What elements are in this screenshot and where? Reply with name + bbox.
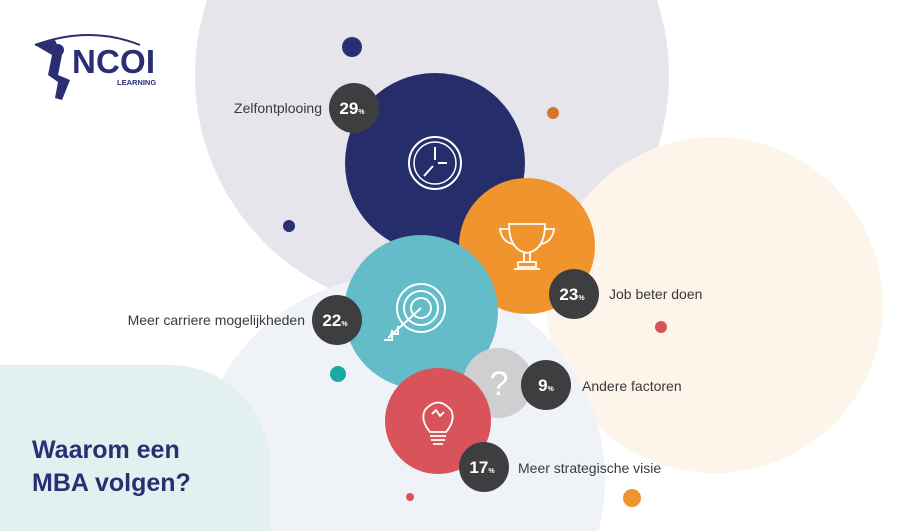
background circle: beige xyxy=(547,137,883,473)
logo: NCOI xyxy=(72,43,155,80)
background shape: mint xyxy=(0,365,270,531)
labels: Meer strategische visie xyxy=(518,460,661,476)
circle: teal target xyxy=(344,235,498,389)
title xyxy=(32,436,191,497)
decorative dots xyxy=(283,37,667,507)
background circle: grey xyxy=(195,0,669,312)
logo xyxy=(35,35,156,100)
labels: Job beter doen xyxy=(609,286,702,302)
labels xyxy=(128,100,702,476)
badges: 17% xyxy=(469,458,495,477)
circle: orange trophy xyxy=(459,178,595,314)
badges: 22% xyxy=(322,311,348,330)
circle: grey question: ? xyxy=(490,365,508,403)
title: MBA volgen? xyxy=(32,469,191,497)
labels: Meer carriere mogelijkheden xyxy=(128,312,305,328)
circle: red bulb xyxy=(385,368,491,474)
badges: 23% xyxy=(559,285,585,304)
labels: Andere factoren xyxy=(582,378,682,394)
badges xyxy=(312,83,599,492)
badges: 29% xyxy=(339,99,365,118)
title: Waarom een xyxy=(32,436,180,464)
circle: navy clock xyxy=(345,73,525,253)
logo: LEARNING xyxy=(117,78,156,87)
circle: grey question xyxy=(463,348,533,418)
badges: 9% xyxy=(538,376,555,395)
background circle: pale blue xyxy=(195,275,605,531)
labels: Zelfontplooing xyxy=(234,100,322,116)
